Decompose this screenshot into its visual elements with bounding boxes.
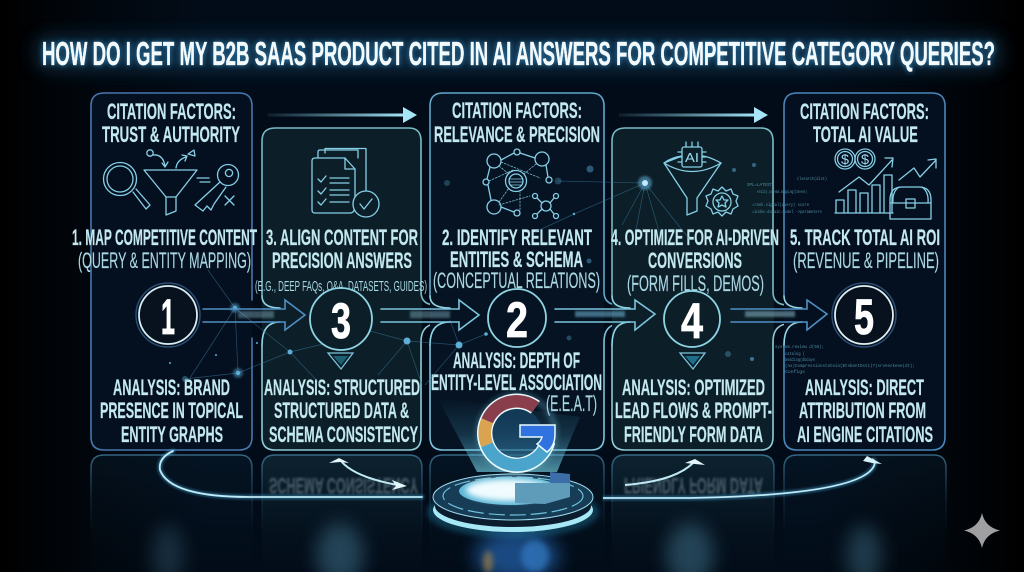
number circle 2 bbox=[488, 289, 546, 348]
heading: citation factors trust and authority bbox=[102, 99, 240, 147]
step title 1: (QUERY & ENTITY MAPPING) bbox=[78, 248, 251, 273]
icon: AI funnel and gear bbox=[664, 142, 738, 216]
step title 2: (CONCEPTUAL RELATIONS) bbox=[433, 268, 600, 293]
floor reflections bbox=[91, 455, 946, 572]
number circle 3: 3 bbox=[331, 293, 351, 349]
analysis text 4: FRIENDLY FORM DATA bbox=[624, 422, 763, 447]
marker triangle 4 bbox=[680, 353, 705, 369]
step title 3 bbox=[255, 225, 427, 295]
analysis text 1: ENTITY GRAPHS bbox=[121, 422, 223, 447]
number circle 4 bbox=[664, 291, 720, 349]
heading: citation factors relevance and precision bbox=[434, 98, 600, 147]
step title 2: ENTITIES & SCHEMA bbox=[450, 247, 583, 272]
step title 4: 4. OPTIMIZE FOR AI-DRIVEN bbox=[611, 225, 779, 250]
top arrow left bbox=[268, 107, 417, 123]
inner double-headed arrow bbox=[329, 458, 407, 490]
analysis text 4: LEAD FLOWS & PROMPT- bbox=[615, 398, 772, 423]
icon: coins chart chest bbox=[835, 149, 936, 219]
code snippet lower: Configs bbox=[785, 369, 805, 375]
arrow: step 2 to step 4 bbox=[555, 300, 655, 330]
code snippet upper bbox=[747, 176, 827, 215]
code snippet upper: SPL=LATEST bbox=[747, 182, 772, 188]
icon: Google G logo bbox=[479, 395, 555, 471]
icon: sparkle watermark bbox=[964, 513, 1000, 548]
number circle 3 bbox=[310, 288, 372, 350]
icon: AI funnel and gear: AI bbox=[685, 150, 699, 165]
analysis text 1: PRESENCE IN TOPICAL bbox=[100, 398, 243, 423]
code snippet lower: bedding(dbdays bbox=[785, 357, 815, 363]
panel: step 5 total AI value bbox=[784, 93, 945, 450]
number circle 1: 1 bbox=[161, 289, 175, 345]
code snippet lower: catalog { bbox=[785, 351, 805, 357]
step title 1 bbox=[72, 225, 257, 273]
step title 3: (E.G., DEEP FAQs, Q&A, DATASETS, GUIDES) bbox=[255, 278, 427, 295]
curved flow line right with arrow bbox=[603, 456, 882, 498]
analysis text 3: STRUCTURED DATA & bbox=[274, 398, 409, 423]
heading: citation factors total AI value bbox=[800, 99, 929, 147]
heading: citation factors relevance and precision: RELEVANCE & PRECISION bbox=[434, 122, 600, 147]
step title 4: (FORM FILLS, DEMOS) bbox=[627, 271, 764, 296]
analysis text 3 bbox=[264, 375, 420, 447]
analysis text 5: ATTRIBUTION FROM bbox=[799, 398, 926, 423]
number circle 1 bbox=[136, 283, 200, 347]
analysis text 3: SCHEMA CONSISTENCY bbox=[269, 422, 418, 447]
heading: citation factors relevance and precision: CITATION FACTORS: bbox=[452, 98, 582, 123]
number circle 4: 4 bbox=[681, 293, 703, 349]
code snippet lower: (ns)Compressionstatein($tsbentDst1)7)srveeckene(dt); bbox=[785, 363, 915, 369]
icon: entity network bbox=[483, 149, 558, 218]
number circle 5: 5 bbox=[854, 289, 874, 345]
heading: citation factors trust and authority: CITATION FACTORS: bbox=[107, 99, 236, 124]
floor reflections: SCHEMA CONSISTENCY bbox=[269, 473, 418, 498]
step title 2 bbox=[433, 225, 600, 293]
step title 1: 1. MAP COMPETITIVE CONTENT bbox=[72, 225, 257, 250]
icon: magnifier funnel key bbox=[104, 150, 238, 215]
icon: coins chart chest: $ bbox=[861, 151, 869, 167]
arrow: step 3 to step 2 bbox=[381, 300, 479, 330]
code snippet upper: =index.domain.model ->parameters bbox=[752, 209, 822, 215]
hologram beam bbox=[437, 397, 580, 472]
heading: citation factors total AI value: TOTAL AI VALUE bbox=[813, 122, 918, 147]
analysis text 5: ANALYSIS: DIRECT bbox=[805, 375, 924, 400]
platform base bbox=[427, 472, 599, 538]
analysis text 3: ANALYSIS: STRUCTURED bbox=[264, 375, 420, 400]
top arrow right bbox=[619, 107, 768, 123]
code snippet upper: tlsearch(dist) bbox=[797, 176, 827, 182]
analysis text 2: ENTITY-LEVEL ASSOCIATION bbox=[431, 370, 602, 395]
analysis text 1 bbox=[100, 375, 243, 447]
code snippet upper: =rank.signal(query) score bbox=[752, 202, 809, 208]
step title 4 bbox=[611, 225, 779, 296]
icon: document checklist bbox=[312, 148, 379, 217]
analysis text 1: ANALYSIS: BRAND bbox=[113, 375, 230, 400]
analysis text 2: (E.E.A.T) bbox=[546, 391, 597, 416]
step title 3: PRECISION ANSWERS bbox=[272, 248, 412, 273]
panel: step 1 trust and authority bbox=[72, 93, 257, 450]
curved flow line left bbox=[160, 451, 422, 497]
panel: step 2 relevance and precision bbox=[430, 93, 617, 450]
marker triangle 3 bbox=[328, 353, 353, 369]
analysis text 4 bbox=[615, 375, 772, 447]
step title 5 bbox=[790, 225, 940, 273]
heading: citation factors trust and authority: TRUST & AUTHORITY bbox=[102, 122, 240, 147]
analysis text 2: ANALYSIS: DEPTH OF bbox=[453, 348, 580, 373]
step title 4: CONVERSIONS bbox=[648, 248, 742, 273]
panel: step 3 precision answers bbox=[255, 128, 434, 450]
number circle 5 bbox=[832, 283, 896, 347]
heading: citation factors total AI value: CITATION FACTORS: bbox=[800, 99, 929, 124]
analysis text 5 bbox=[797, 375, 933, 447]
inner curved arrow right bbox=[625, 459, 705, 485]
analysis text 4: ANALYSIS: OPTIMIZED bbox=[622, 375, 765, 400]
code snippet upper: entity.schema.mapping(tokens) bbox=[757, 189, 807, 195]
arrow: step 4 to step 5 bbox=[731, 300, 827, 330]
step title 3: 3. ALIGN CONTENT FOR bbox=[266, 225, 418, 250]
analysis text 2 bbox=[431, 348, 602, 416]
icon: coins chart chest: $ bbox=[841, 151, 849, 167]
code snippet lower: system.review d(58); bbox=[775, 344, 824, 350]
panel: step 4 conversions bbox=[611, 128, 786, 450]
number circle 2: 2 bbox=[506, 292, 528, 348]
arrow: step 1 to step 3 bbox=[203, 300, 305, 330]
floor reflections: FRIENDLY FORM DATA bbox=[624, 473, 763, 498]
step title 2: 2. IDENTIFY RELEVANT bbox=[442, 225, 592, 250]
network lines and nodes bbox=[169, 163, 756, 386]
code snippet lower bbox=[775, 344, 915, 375]
